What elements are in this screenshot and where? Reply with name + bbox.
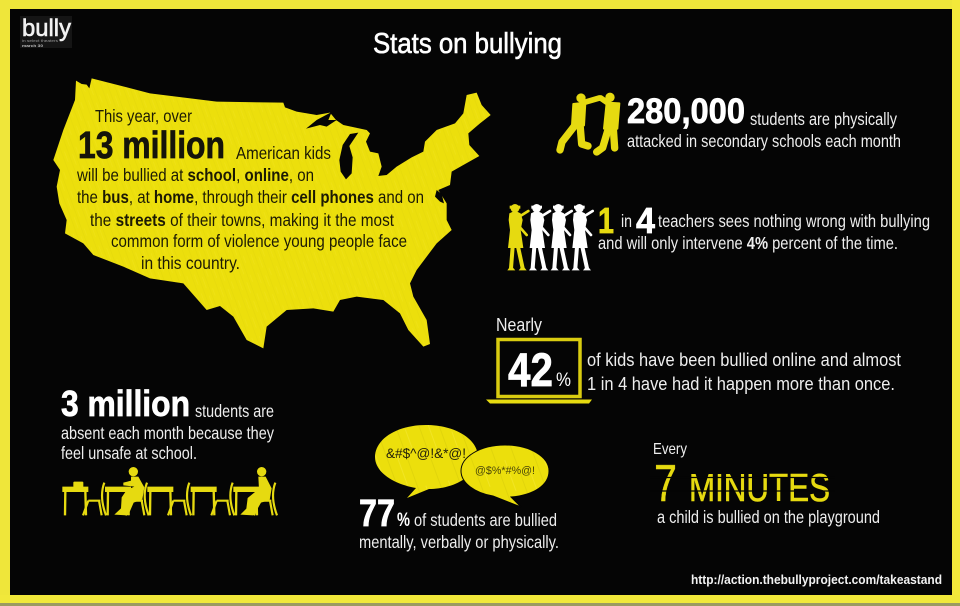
logo: bully: bully [22,15,71,42]
map of the USA [53,78,491,348]
number: 4: 4 [636,200,655,241]
logo: bully: march 30 [22,43,44,48]
logo: bully: in select theaters [22,38,58,43]
text: nearly: Nearly [496,315,542,335]
text: symbols one: &#$^@!&*@! [386,446,466,461]
text: of kids have been bullied: of kids have been bullied online and almost [587,349,901,370]
panel: 280,000 statistic [560,92,901,152]
panel: 1 in 4 teachers statistic [507,200,930,270]
panel: 3 million statistic [61,383,277,515]
url: http://action.thebullyproject.com/takeastand [691,572,942,587]
text: 1 in 4: 1 in 4 have had it happen more than once. [587,373,895,394]
number: 280,000: 280,000 [627,92,745,131]
text: in this country: in this country. [141,253,240,273]
text: students are physically: students are physically [750,109,897,129]
icon: laptop [486,340,592,404]
text: bold percent: % [397,510,410,531]
text: absent each month: absent each month because they [61,423,274,443]
text: students are: students are [195,401,274,421]
panel: US map with 13 million statistic [53,78,491,348]
panel: 77% statistic [359,425,559,552]
text: the streets: the streets of their towns, making it the most [90,210,394,230]
icon: classroom desks [62,467,277,515]
panel: 7 minutes statistic [650,441,880,527]
text: every: Every [653,441,687,458]
number: 3 million: 3 million [61,383,190,424]
text: mentally, verbally: mentally, verbally or physically. [359,532,559,552]
text: this year, over: This year, over [95,106,192,126]
text: American kids: American kids [236,143,331,163]
text: percent sign: % [556,370,571,391]
text: feel unsafe: feel unsafe at school. [61,443,197,463]
text: in: in [621,211,632,231]
number: 42: 42 [508,343,553,396]
icon: two fighters [560,93,619,152]
text: symbols two: @$%*#%@! [475,465,535,477]
text: digital MINUTES: MINUTES [689,467,830,510]
text: a child is bullied: a child is bullied on the playground [657,507,880,527]
icon: four teachers pointing [507,204,593,270]
number: 1: 1 [598,200,614,241]
number: 77: 77 [359,493,395,535]
panel: 42% statistic [486,315,901,404]
text: the bus: the bus, at home, through their cell phones and on [77,187,424,207]
number: digital 7: 7 [654,455,677,513]
title: Stats on bullying [373,28,562,60]
icon: large speech bubble [375,425,478,498]
text: 13 million: 13 million [78,125,225,167]
icon: small speech bubble [461,445,549,507]
text: attacked in secondary schools: attacked in secondary schools each month [627,131,901,151]
text: will be bullied: will be bullied at school, online, on [76,165,314,185]
text: and will only intervene: and will only intervene 4% percent of the time. [598,233,898,253]
text: of students are bullied: of students are bullied [414,510,557,530]
text: common form of violence: common form of violence young people face [111,231,407,251]
